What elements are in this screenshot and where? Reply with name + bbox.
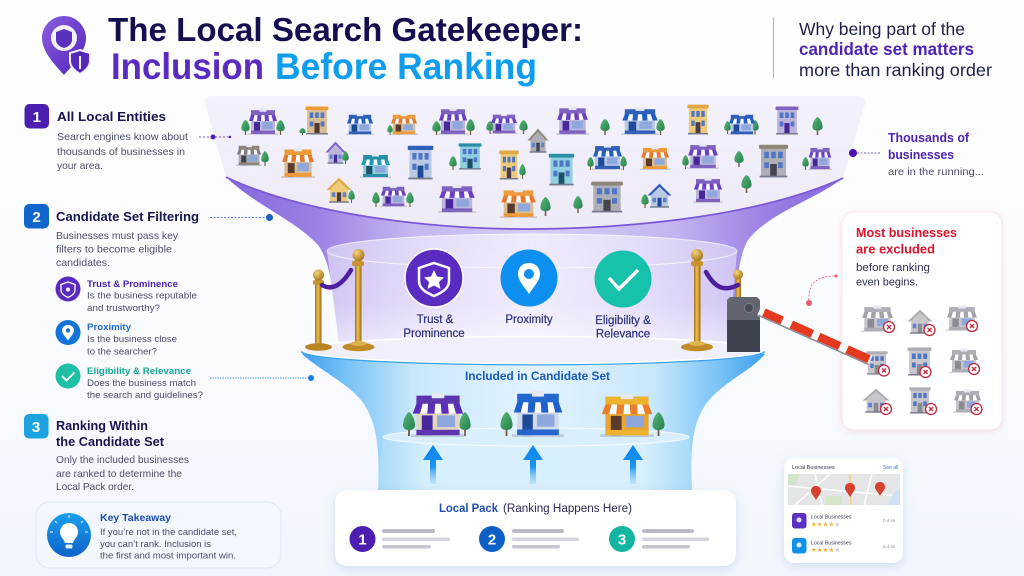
callout: key takeaway: If you’re not in the candidate set, <box>100 527 237 538</box>
step 1: all local entities: 1 <box>33 109 41 126</box>
filter item: eligibility and relevance <box>56 364 203 401</box>
subtitle: Why being part of the <box>799 19 965 39</box>
result row 1: Local Businesses <box>811 514 852 520</box>
subtitle: more than ranking order <box>799 60 992 80</box>
local pack heading: (Ranking Happens Here) <box>503 503 632 515</box>
subtitle <box>799 19 992 80</box>
rank 2 <box>479 526 579 552</box>
step 2: candidate set filtering: candidates. <box>56 257 110 269</box>
connector: step 2 to funnel <box>210 214 273 221</box>
step 1: all local entities: All Local Entities <box>57 109 166 124</box>
step 2: candidate set filtering: Candidate Set Filtering <box>56 209 199 224</box>
included business: blue shop <box>500 391 564 437</box>
rank 3 <box>609 526 709 552</box>
panel: most businesses are excluded: even begins. <box>856 276 918 288</box>
icon: eligibility and relevance filter <box>594 250 652 308</box>
step 3: ranking within the candidate set <box>24 414 189 493</box>
step 2: candidate set filtering <box>24 204 199 269</box>
icon: proximity filter <box>500 250 558 306</box>
callout: key takeaway <box>36 502 281 568</box>
step 3: ranking within the candidate set: Only the included businesses <box>56 454 189 466</box>
result row 2: 0.4 mi <box>883 544 895 549</box>
result row 1: 0.4 mi <box>883 518 895 523</box>
panel: most businesses are excluded <box>842 212 1002 430</box>
icons: crowd of local businesses <box>236 105 832 218</box>
filter item: proximity: to the searcher? <box>87 346 157 358</box>
rank 1 <box>350 526 450 552</box>
icon: trust and prominence filter <box>405 249 463 307</box>
title: Before Ranking <box>275 46 537 87</box>
included business: purple shop <box>403 393 471 437</box>
funnel: purple filter stage body <box>226 177 843 352</box>
rank 2: 2 <box>488 532 496 548</box>
connector: barrier to exclusion panel <box>806 274 838 306</box>
panel: map results card <box>784 458 903 563</box>
connector: crowd to thousands label <box>849 149 880 157</box>
right stanchions with rope <box>681 249 743 351</box>
callout: thousands of businesses: Thousands of <box>888 131 970 145</box>
map <box>788 474 900 505</box>
included business: orange shop <box>600 394 665 437</box>
panel: map results card: See all <box>883 465 898 471</box>
step 2: candidate set filtering: 2 <box>32 209 41 226</box>
panel: most businesses are excluded: Most businesses <box>856 225 957 240</box>
funnel: platform rim <box>301 336 765 366</box>
gate box <box>727 297 760 352</box>
step 3: ranking within the candidate set: the Candidate Set <box>56 434 165 449</box>
panel: most businesses are excluded: before ranking <box>856 262 930 274</box>
icon: light bulb <box>47 513 91 557</box>
callout: thousands of businesses: businesses <box>888 148 954 162</box>
step 1: all local entities: your area. <box>57 160 103 172</box>
callout: thousands of businesses: are in the running... <box>888 166 984 178</box>
title <box>108 11 583 87</box>
panel: most businesses are excluded: are excluded <box>856 242 935 256</box>
connector: step 1 to crowd <box>199 134 231 140</box>
filter item: trust and prominence <box>56 276 197 314</box>
filter labels: Relevance <box>596 328 650 340</box>
arrow up 3 <box>623 445 643 484</box>
icon: location pin with shield logo <box>42 16 90 75</box>
heading: included in candidate set: Included in Candidate Set <box>465 371 610 383</box>
business row 3 <box>327 175 752 218</box>
filter item: trust and prominence: Trust & Prominence <box>87 279 178 290</box>
rank 3: 3 <box>618 532 626 548</box>
filter labels: Eligibility & <box>595 315 651 327</box>
filter labels: Prominence <box>403 328 465 340</box>
step 3: ranking within the candidate set: Ranking Within <box>56 418 148 433</box>
connector: filter items to blue funnel <box>210 375 314 381</box>
callout: key takeaway: the first and most important win. <box>100 550 236 562</box>
funnel: blue candidate set body <box>302 354 765 492</box>
filter item: eligibility and relevance: the search and guidelines? <box>87 390 203 401</box>
excluded business grid <box>861 306 982 414</box>
filter labels: Proximity <box>505 314 553 326</box>
callout: thousands of businesses <box>888 131 984 178</box>
arrow up 1 <box>423 445 443 484</box>
panel: local pack <box>335 490 736 566</box>
filter item: proximity: Is the business close <box>87 334 177 345</box>
panel: map results card: Local Businesses <box>792 465 835 471</box>
step 1: all local entities: thousands of businesses in <box>57 146 185 158</box>
business row 2 <box>236 129 832 185</box>
filter item: eligibility and relevance: Does the business match <box>87 378 196 389</box>
filter item: trust and prominence: Is the business reputable <box>87 290 197 302</box>
left stanchions with rope <box>305 249 374 351</box>
step 3: ranking within the candidate set: 3 <box>32 419 40 436</box>
local pack heading: Local Pack <box>439 503 499 515</box>
step 2: candidate set filtering: filters to become eligible <box>56 244 172 256</box>
excluded badges <box>878 320 982 414</box>
funnel: top crowd surface <box>205 96 865 229</box>
step 1: all local entities: Search engines know about <box>57 131 188 143</box>
subtitle: candidate set matters <box>799 39 974 59</box>
callout: key takeaway: Key Takeaway <box>100 512 171 524</box>
business row 1 <box>241 105 823 135</box>
title: Inclusion <box>111 46 264 87</box>
arrow up 2 <box>523 445 543 484</box>
filter labels <box>403 314 651 340</box>
callout: key takeaway: you can’t rank. Inclusion is <box>100 539 211 550</box>
local pack heading <box>439 503 632 515</box>
result row 1: ★★★★★ <box>811 520 840 528</box>
result row 2: Local Businesses <box>811 540 852 546</box>
step 3: ranking within the candidate set: Local Pack order. <box>56 481 134 493</box>
gate barrier arm <box>757 306 872 365</box>
result row 1 <box>792 513 895 528</box>
step 3: ranking within the candidate set: are ranked to determine the <box>56 468 182 480</box>
result row 2 <box>792 538 895 554</box>
rank 1: 1 <box>358 532 367 548</box>
filter item: proximity <box>56 320 177 358</box>
filter labels: Trust & <box>417 314 454 326</box>
title: The Local Search Gatekeeper: <box>108 11 583 48</box>
filter item: trust and prominence: and trustworthy? <box>87 303 160 314</box>
filter item: proximity: Proximity <box>87 322 132 333</box>
step 1: all local entities <box>24 104 188 172</box>
step 2: candidate set filtering: Businesses must pass key <box>56 230 179 242</box>
result row 2: ★★★★★ <box>811 546 840 554</box>
filter item: eligibility and relevance: Eligibility & Relevance <box>87 366 191 377</box>
